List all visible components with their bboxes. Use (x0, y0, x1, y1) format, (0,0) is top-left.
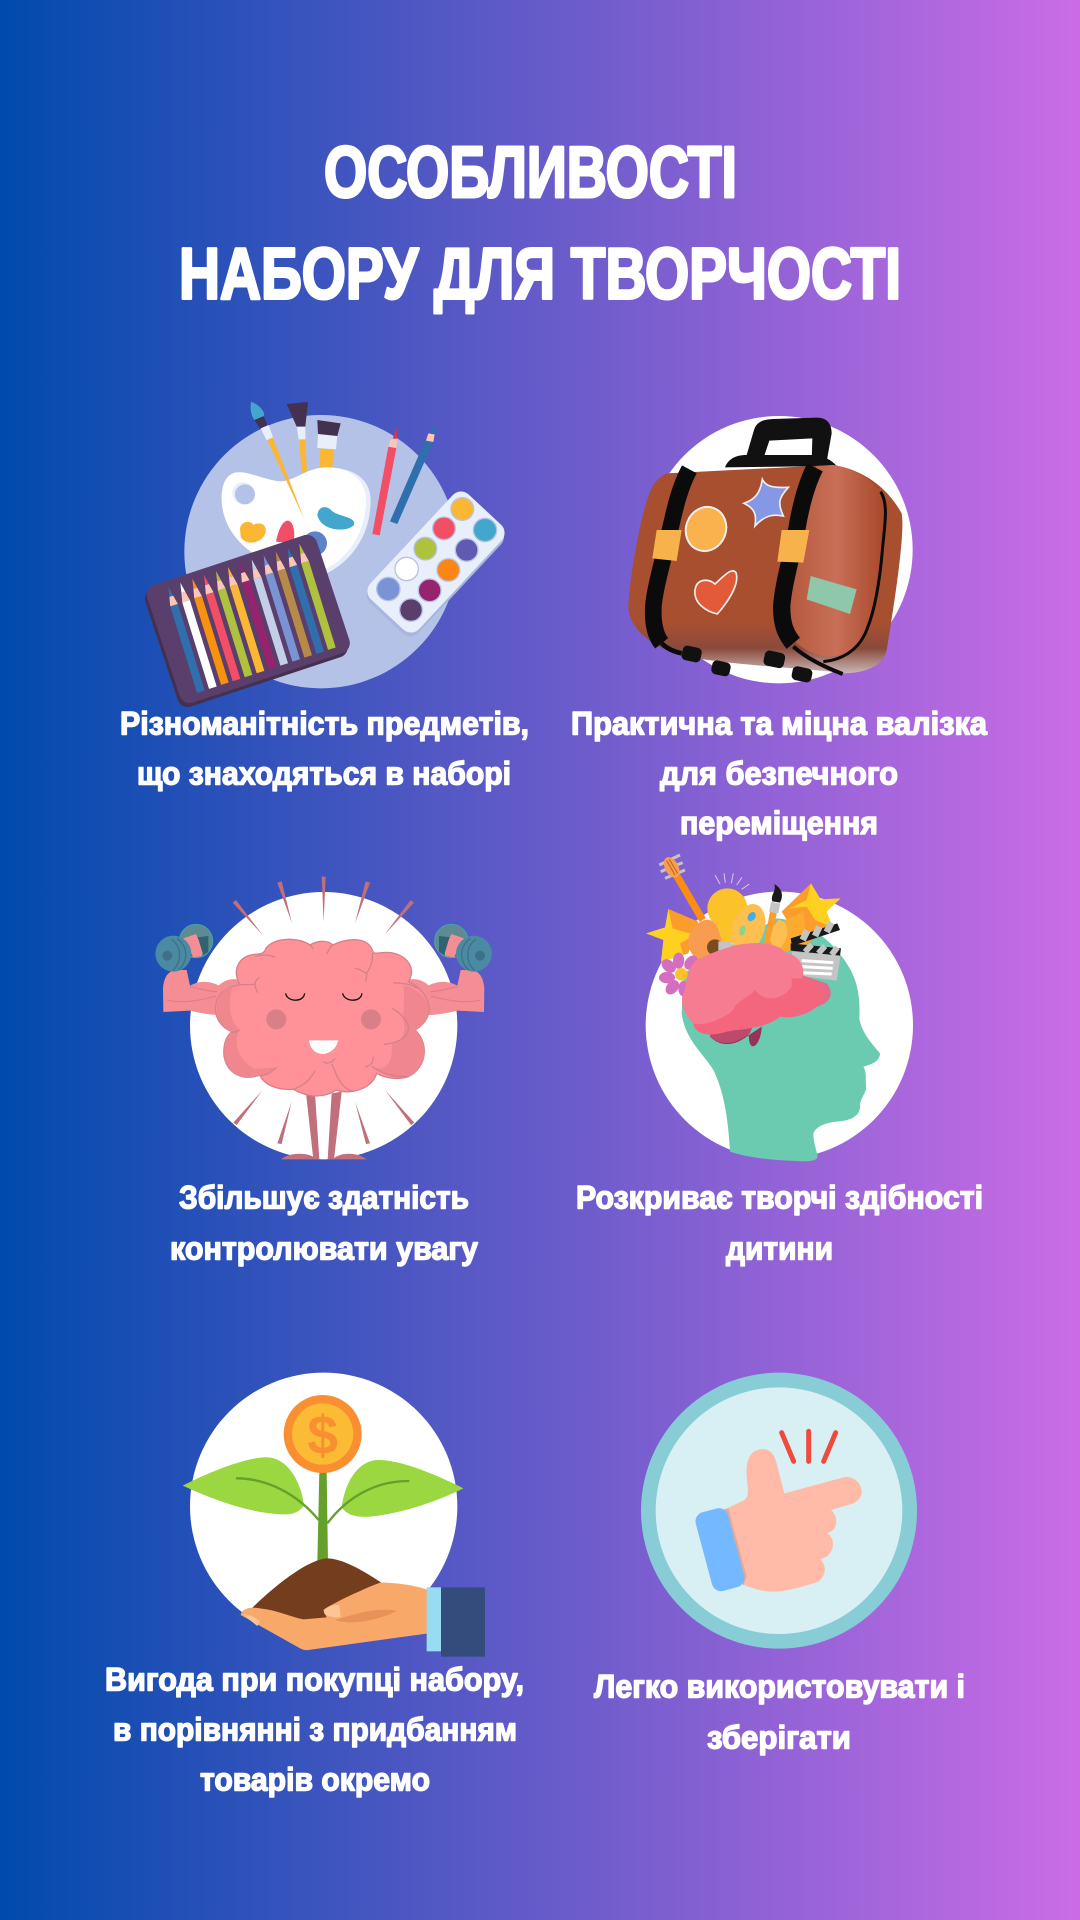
icon: suitcase (628, 416, 913, 683)
stars (646, 883, 841, 962)
white circle backdrop (645, 416, 913, 683)
white circle backdrop (646, 892, 913, 1159)
caption 6: Легко використовувати і (594, 1668, 965, 1704)
orange guitar body (688, 920, 727, 963)
wrist shadow (723, 1508, 747, 1586)
hand (241, 1583, 428, 1650)
light circle backdrop (184, 415, 458, 688)
caption 3: контролювати увагу (170, 1230, 478, 1266)
green label (807, 576, 857, 614)
pale inner disc (656, 1387, 902, 1634)
caption 2: для безпечного (660, 756, 898, 792)
title (179, 133, 901, 314)
buckles (652, 530, 809, 563)
right side panel (779, 465, 883, 656)
flower (659, 953, 700, 997)
sleeve (427, 1587, 485, 1657)
straps (653, 467, 885, 674)
pencil case (142, 532, 353, 710)
caption 4: дитини (726, 1230, 833, 1266)
guitar (659, 854, 703, 920)
caption 5: в порівнянні з придбанням (113, 1712, 517, 1748)
icon: snapping hand (641, 1373, 917, 1649)
title: ОСОБЛИВОСТІ (324, 133, 737, 213)
caption 2: переміщення (680, 805, 878, 841)
icon: art supplies (142, 402, 509, 710)
brain folds (232, 945, 417, 1092)
caption 2 (571, 706, 987, 841)
paint brushes (251, 402, 341, 519)
soil (250, 1558, 385, 1623)
caption 6 (594, 1668, 965, 1756)
snap lines (782, 1431, 836, 1461)
teal head profile (682, 918, 880, 1161)
case body (628, 465, 902, 673)
caption 2: Практична та міцна валізка (571, 706, 987, 742)
light bulb (707, 873, 749, 943)
caption 6: зберігати (707, 1720, 851, 1756)
handle (725, 418, 837, 467)
caption 4 (576, 1180, 983, 1266)
icon: creative head (646, 854, 913, 1161)
clapperboard (791, 923, 841, 981)
coin (284, 1395, 362, 1473)
blue cuff (693, 1506, 747, 1593)
caption 4: Розкриває творчі здібності (576, 1180, 983, 1216)
white circle backdrop (190, 1373, 457, 1640)
paint brush (763, 884, 782, 950)
smile (309, 1040, 338, 1054)
wheels (681, 645, 813, 683)
brain shading (217, 985, 429, 1078)
watercolour tray (362, 487, 509, 641)
teal ring (641, 1373, 917, 1649)
caption 5: Вигода при покупці набору, (105, 1662, 524, 1698)
rays (233, 877, 414, 1144)
coin: $ (307, 1404, 338, 1466)
caption 3: Збільшує здатність (179, 1180, 469, 1216)
closed eyes (286, 993, 362, 1000)
caption 1 (120, 706, 529, 792)
cheeks (266, 1009, 381, 1029)
small palette (725, 900, 771, 957)
palette (222, 437, 371, 573)
hand (723, 1449, 862, 1592)
stickers (680, 479, 788, 614)
icon: strong brain (155, 877, 492, 1159)
brain body (215, 939, 429, 1096)
right arm with dumbbell (407, 924, 492, 1015)
brain (682, 943, 831, 1046)
caption 1: Різноманітність предметів, (120, 706, 529, 742)
music note (773, 912, 807, 953)
caption 5 (105, 1662, 524, 1798)
white circle backdrop (190, 892, 457, 1159)
leaves (183, 1457, 463, 1523)
loose pencils (372, 423, 437, 535)
stem (317, 1472, 328, 1563)
title: НАБОРУ ДЛЯ ТВОРЧОСТІ (179, 234, 901, 314)
caption 3 (170, 1180, 478, 1266)
caption 1: що знаходяться в наборі (137, 756, 511, 792)
caption 5: товарів окремо (200, 1762, 430, 1798)
left arm with dumbbell (155, 924, 241, 1015)
legs and feet (281, 1090, 367, 1159)
icon: money plant (183, 1373, 485, 1657)
